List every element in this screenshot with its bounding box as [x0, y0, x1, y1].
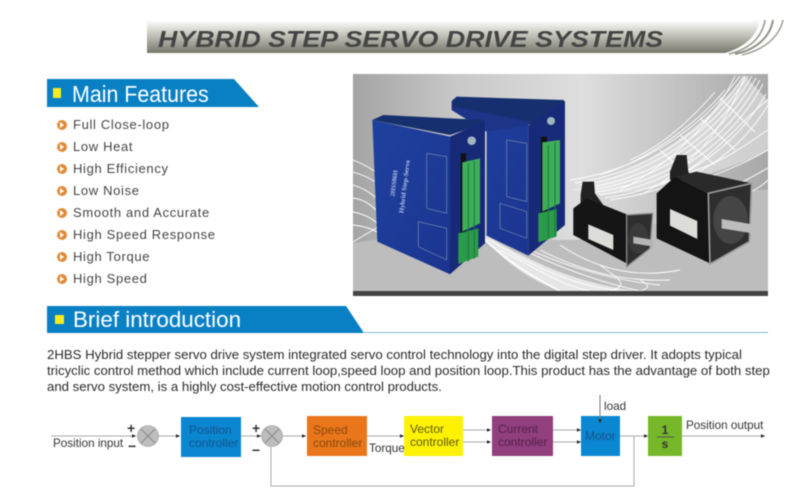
intro paragraph: 2HBS Hybrid stepper servo drive system integrated servo control technology into the digital step driver. It adopts typical	[47, 347, 742, 362]
block: motor: Motor	[585, 429, 616, 443]
rear driver	[452, 97, 565, 256]
block: position controller: controller	[189, 436, 238, 450]
signs: −	[128, 438, 136, 454]
feature list	[56, 117, 216, 286]
feature list: Full Close-loop	[73, 117, 170, 132]
intro paragraph: tricyclic control method which include current loop,speed loop and position loop.This product has the advantage of both step	[47, 363, 770, 378]
small motor	[573, 182, 653, 267]
block: current controller: Current	[498, 422, 539, 436]
heading rule	[363, 332, 768, 333]
block: integrator	[648, 416, 682, 456]
heading: Brief introduction: Brief introduction	[73, 307, 241, 332]
signs: +	[127, 420, 135, 436]
arrow: load	[599, 395, 601, 423]
front driver	[372, 115, 485, 274]
control loop diagram	[50, 394, 766, 487]
intro paragraph: and servo system, is a highly cost-effective motion control products.	[47, 379, 442, 394]
title banner: HYBRID STEP SERVO DRIVE SYSTEMS	[158, 26, 663, 52]
labels: load	[604, 400, 626, 413]
feature list: High Speed Response	[73, 227, 216, 242]
front driver: 2HSS86H	[389, 170, 400, 197]
block: vector controller: controller	[410, 435, 459, 449]
labels	[53, 400, 764, 455]
heading: Main Features	[47, 79, 259, 107]
block: current controller: controller	[498, 435, 547, 449]
block: speed controller: Speed	[313, 423, 348, 437]
wave lines	[353, 76, 768, 291]
signs: −	[252, 442, 260, 458]
heading: Main Features: Main Features	[72, 81, 209, 107]
block: integrator: 1	[662, 423, 669, 437]
block: vector controller: Vector	[410, 422, 444, 436]
block: current controller	[492, 416, 553, 456]
summing junction 1	[138, 426, 158, 446]
block: position controller	[181, 417, 241, 457]
block: integrator: s	[662, 437, 669, 451]
signal lines	[51, 430, 765, 486]
feature list: Low Heat	[73, 139, 133, 154]
feature list: High Torque	[73, 249, 150, 264]
signs	[127, 420, 260, 458]
product photo panel	[352, 74, 769, 297]
bottom bar	[353, 291, 768, 296]
feature list: Low Noise	[73, 183, 140, 198]
intro paragraph	[46, 347, 770, 394]
signs: +	[252, 420, 260, 436]
feature list: High Efficiency	[73, 161, 169, 176]
labels: Torque	[369, 442, 405, 455]
feature list: High Speed	[73, 271, 148, 286]
block: position controller: Position	[189, 423, 232, 437]
block: speed controller	[307, 416, 367, 456]
heading: Brief introduction	[47, 306, 364, 333]
title banner	[146, 19, 784, 56]
labels: Position input	[53, 437, 124, 450]
block: speed controller: controller	[313, 436, 362, 450]
labels: Position output	[686, 419, 764, 432]
summing junction 2	[262, 426, 282, 446]
feature list: Smooth and Accurate	[73, 205, 210, 220]
block: motor	[581, 416, 620, 456]
block: vector controller	[404, 416, 463, 456]
large motor	[657, 155, 759, 264]
front driver: Hybrid Step-Servo	[398, 159, 412, 214]
